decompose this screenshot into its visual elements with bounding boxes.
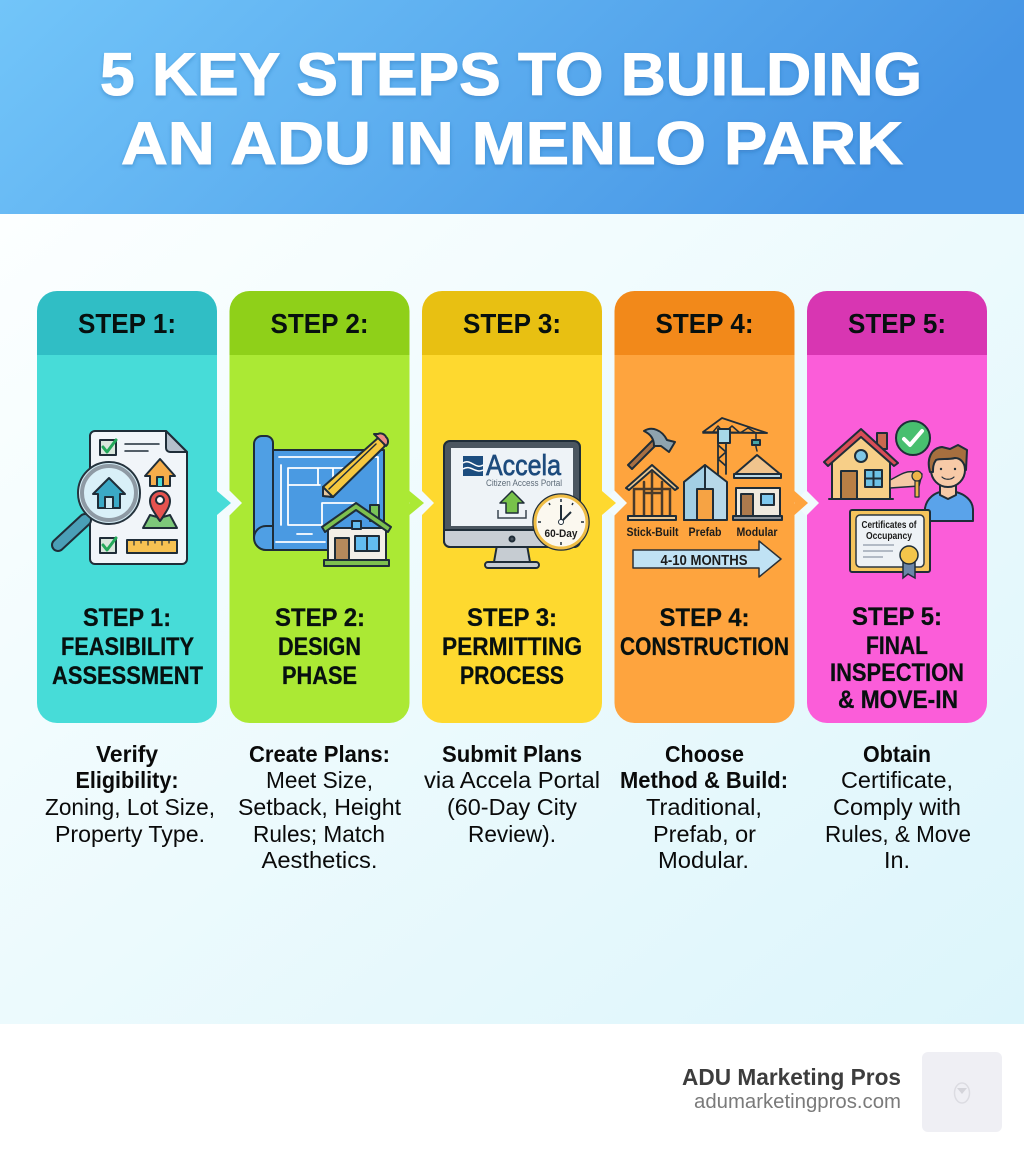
icon: construction methods and timeline: 4-10 MONTHS — [660, 552, 748, 569]
description: step 3 — [424, 741, 600, 847]
panel: step 4 — [602, 291, 794, 723]
description: step 4: Prefab, or — [653, 821, 756, 847]
step 4 title: CONSTRUCTION — [620, 633, 789, 661]
description: step 2: Rules; Match — [253, 821, 385, 847]
description: step 4: Modular. — [658, 847, 749, 873]
step 1 title — [52, 604, 203, 690]
description: step 1: Eligibility: — [76, 767, 178, 793]
step 5 title: FINAL — [866, 632, 928, 660]
panel: step 2 — [217, 291, 410, 723]
icon: construction methods and timeline: Modular — [736, 525, 778, 539]
header band — [0, 0, 1024, 214]
panel: step 3 — [409, 291, 602, 723]
description: step 2: Setback, Height — [238, 794, 402, 820]
step 3 title — [442, 604, 582, 690]
description: step 4: Choose — [665, 741, 744, 767]
arrow: step 2 to step 3 — [409, 490, 434, 516]
description: step 1: Verify — [96, 741, 158, 767]
description: step 5: Certificate, — [841, 767, 953, 793]
description: step 5: Rules, & Move — [825, 821, 971, 847]
title: AN ADU IN MENLO PARK — [121, 110, 903, 177]
icon: construction methods and timeline: Prefab — [688, 525, 722, 539]
panel: step 1 — [37, 291, 217, 723]
icon: construction methods and timeline — [626, 418, 782, 577]
description: step 4 — [620, 741, 788, 873]
title — [100, 41, 922, 177]
description: step 2 — [238, 741, 402, 873]
icon: house, keys and certificate — [824, 421, 973, 578]
step 1 title: FEASIBILITY — [61, 633, 194, 661]
icon: monitor with Accela portal and clock — [444, 441, 589, 568]
description: step 3: via Accela Portal — [424, 767, 600, 793]
brand name: ADU Marketing Pros — [682, 1064, 901, 1090]
step 5 header label: STEP 5: — [848, 308, 946, 339]
description: step 5: Obtain — [863, 741, 931, 767]
step 2 title: PHASE — [282, 662, 357, 690]
step 1 title: STEP 1: — [83, 604, 171, 632]
footer — [0, 1024, 1024, 1154]
step 2 header label: STEP 2: — [270, 308, 368, 339]
description: step 3: Submit Plans — [442, 741, 582, 767]
description: step 1: Zoning, Lot Size, — [45, 794, 215, 820]
panel: step 5 — [794, 291, 987, 723]
icon: blueprint with pencil and house — [254, 433, 391, 566]
icon: house, keys and certificate: Occupancy — [866, 530, 912, 542]
description: step 2: Meet Size, — [266, 767, 373, 793]
arrow: step 3 to step 4 — [602, 490, 627, 516]
step 3 title: STEP 3: — [467, 604, 557, 632]
description: step 2: Create Plans: — [249, 741, 390, 767]
step 2 title: STEP 2: — [275, 604, 365, 632]
step 2 title — [275, 604, 365, 690]
description: step 5: Comply with — [833, 794, 961, 820]
step 3 title: PROCESS — [460, 662, 564, 690]
description: step 2: Aesthetics. — [262, 847, 378, 873]
content background — [0, 214, 1024, 1024]
step 1 header label: STEP 1: — [78, 308, 176, 339]
step 3 header label: STEP 3: — [463, 308, 561, 339]
step 5 title: & MOVE-IN — [838, 686, 958, 714]
description: step 3: (60-Day City — [447, 794, 577, 820]
logo placeholder — [922, 1052, 1002, 1132]
icon: checklist with magnifier — [58, 431, 187, 564]
icon: monitor with Accela portal and clock: Accela — [486, 450, 562, 482]
step 4 header label: STEP 4: — [656, 308, 754, 339]
step 5 title: STEP 5: — [852, 603, 942, 631]
description: step 4: Method & Build: — [620, 767, 788, 793]
step 4 title — [620, 604, 789, 661]
step 5 title: INSPECTION — [830, 659, 964, 687]
description: step 1: Property Type. — [55, 821, 205, 847]
description: step 5 — [825, 741, 971, 873]
step 5 title — [830, 603, 964, 714]
description: step 1 — [45, 741, 215, 847]
icon: construction methods and timeline: Stick-Built — [626, 525, 678, 539]
arrow: step 4 to step 5 — [794, 490, 819, 516]
step 3 title: PERMITTING — [442, 633, 582, 661]
title: 5 KEY STEPS TO BUILDING — [100, 41, 922, 108]
description: step 5: In. — [884, 847, 910, 873]
description: step 3: Review). — [468, 821, 556, 847]
arrow: step 1 to step 2 — [217, 490, 242, 516]
brand url: adumarketingpros.com — [694, 1091, 901, 1113]
icon: monitor with Accela portal and clock: 60-Day — [544, 528, 578, 540]
icon: monitor with Accela portal and clock: Citizen Access Portal — [486, 478, 562, 488]
step 4 title: STEP 4: — [660, 604, 750, 632]
icon: house, keys and certificate: Certificates of — [862, 519, 917, 531]
step 1 title: ASSESSMENT — [52, 662, 203, 690]
step 2 title: DESIGN — [278, 633, 361, 661]
description: step 4: Traditional, — [646, 794, 762, 820]
